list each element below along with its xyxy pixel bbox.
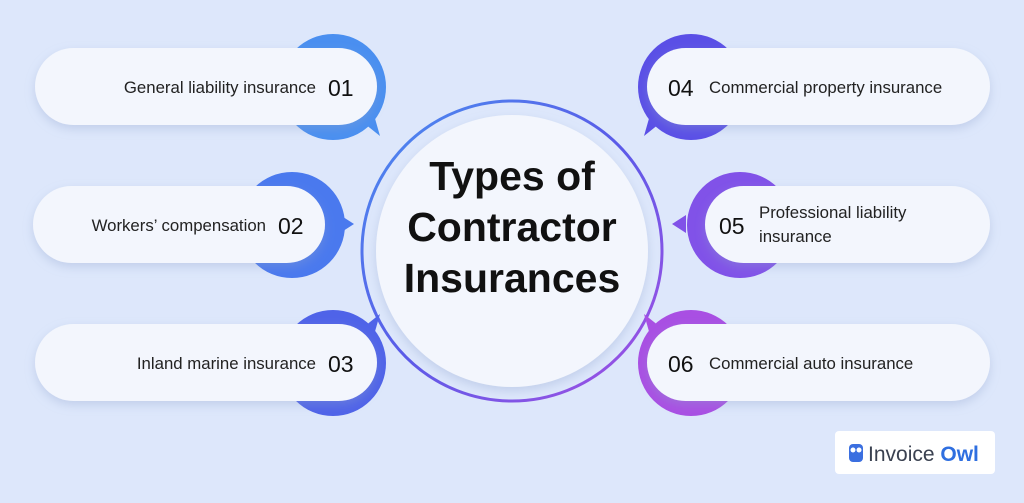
text: Insurances <box>404 255 620 301</box>
central circle <box>362 101 662 401</box>
text: Contractor <box>407 204 617 250</box>
item 06: 06 <box>668 351 694 377</box>
item 02: 02 <box>278 213 304 239</box>
item 04: Commercial property insurance <box>709 78 942 97</box>
item 02: Workers’ compensation <box>92 216 266 235</box>
item 05: insurance <box>759 227 832 246</box>
title: Types of <box>429 153 595 199</box>
logo <box>835 431 995 474</box>
item 05: 05 <box>719 213 745 239</box>
item 06: Commercial auto insurance <box>709 354 913 373</box>
item 03: 03 <box>328 351 354 377</box>
item 02 <box>33 172 354 278</box>
item 01 <box>35 34 386 140</box>
item 05: Professional liability <box>759 203 907 222</box>
item 01: 01 <box>328 75 354 101</box>
logo: Invoice Owl <box>868 443 979 466</box>
item 03: Inland marine insurance <box>137 354 316 373</box>
item 06 <box>638 310 990 416</box>
item 05 <box>672 172 990 278</box>
item 04: 04 <box>668 75 694 101</box>
item 04 <box>638 34 990 140</box>
item 01: General liability insurance <box>124 78 316 97</box>
item 03 <box>35 310 386 416</box>
